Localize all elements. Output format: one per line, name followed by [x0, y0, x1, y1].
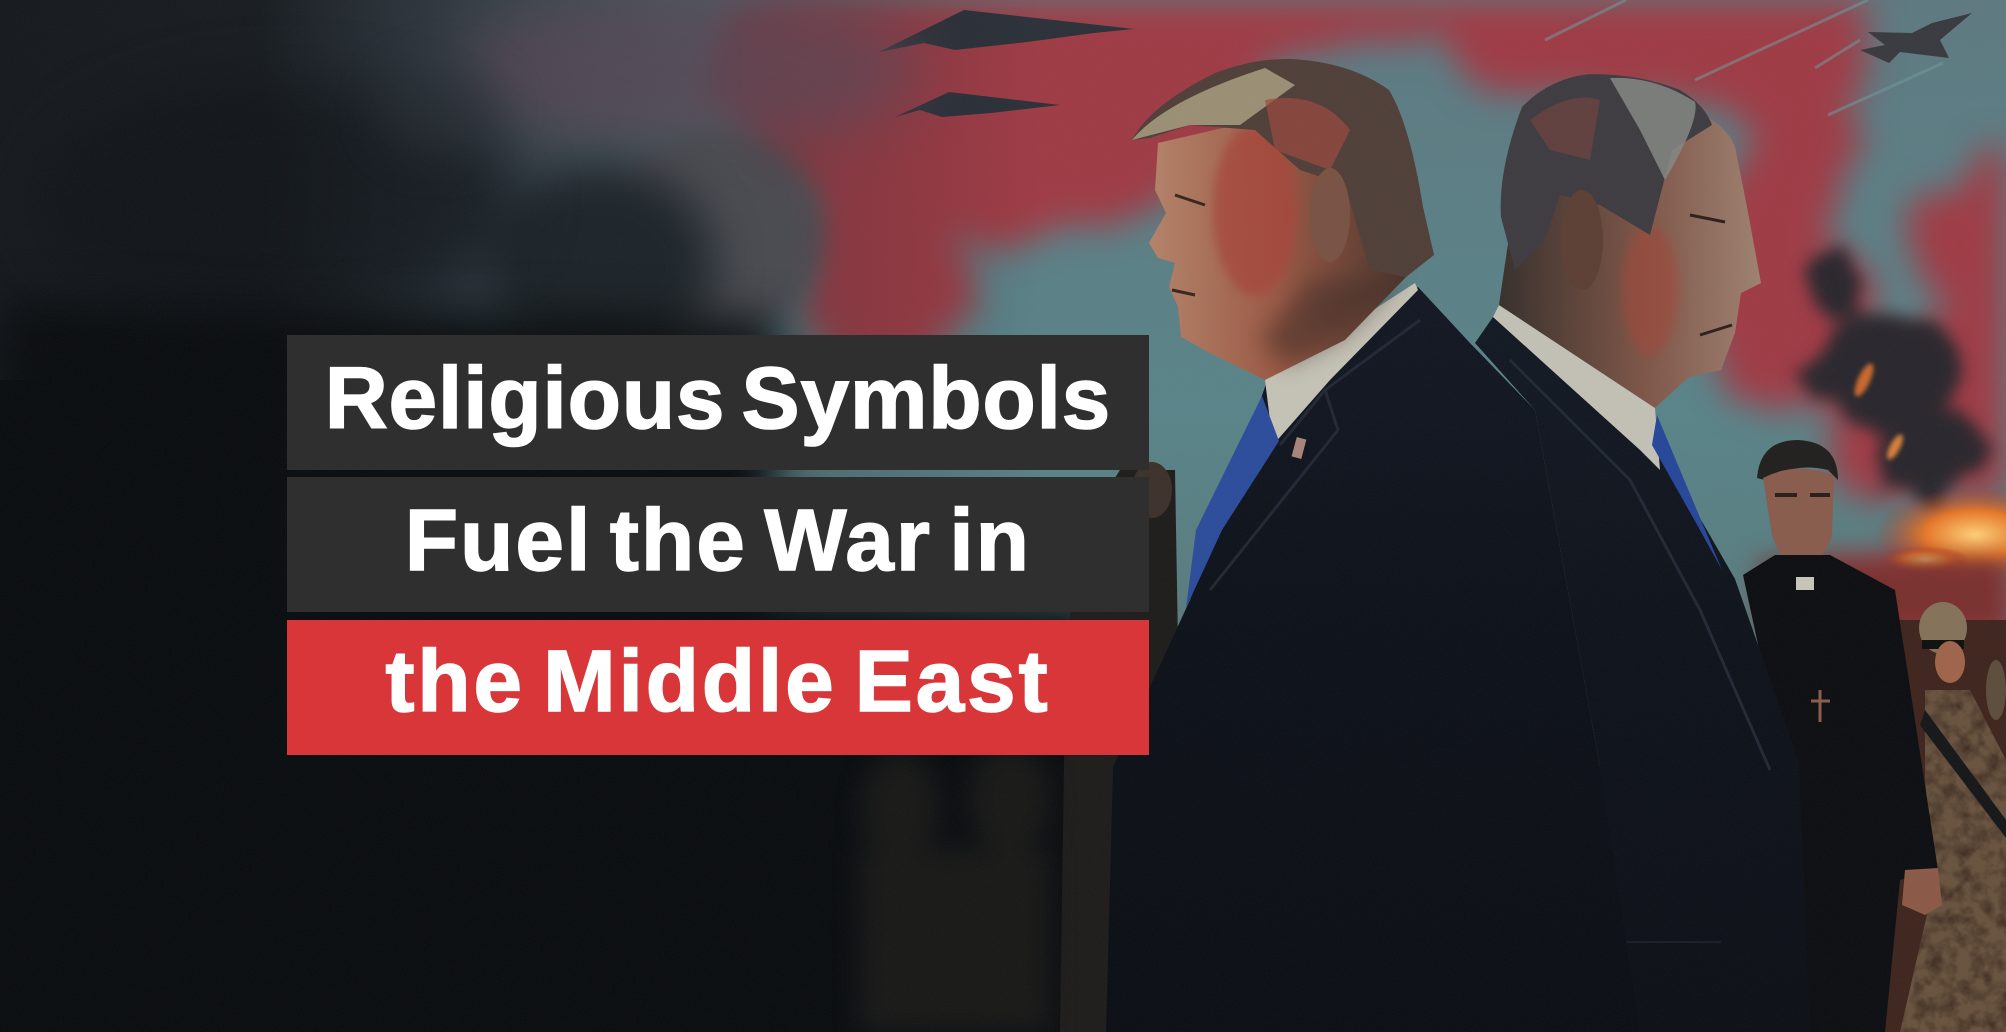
title line two [287, 477, 1149, 612]
collar [1265, 283, 1418, 445]
lower background with crowd of soldiers [860, 462, 1180, 1032]
soldier [1900, 602, 2006, 1032]
ear [1561, 190, 1603, 290]
icon: bomber one [879, 10, 1134, 52]
title line one [287, 335, 1149, 470]
flag pin [1292, 437, 1306, 459]
hair [1501, 74, 1712, 270]
title line one: Religious Symbols [325, 350, 1111, 447]
face [1149, 110, 1406, 380]
red clouds [715, 0, 2006, 650]
hair [1132, 59, 1434, 277]
contrails [1545, 0, 1943, 115]
tie [1652, 415, 1722, 570]
dark smoke clouds right [1810, 250, 1990, 500]
suit [1106, 287, 1640, 1032]
title line two: Fuel the War in [405, 492, 1031, 589]
suit [1475, 317, 1810, 1032]
pectoral cross [1811, 690, 1830, 722]
title line three: the Middle East [385, 633, 1051, 730]
left smoke mass [0, 0, 1105, 1032]
title line three [287, 620, 1149, 755]
explosions and fire [1851, 361, 2006, 583]
red skin tones [1622, 225, 1678, 355]
icon: fighter jet [1860, 13, 1972, 63]
lapel [1210, 320, 1420, 590]
aircraft and contrails [879, 0, 1972, 117]
eye and mouth shadow [1172, 195, 1205, 295]
red skin tones [1213, 125, 1297, 295]
neck shadow [1260, 278, 1400, 365]
red ground [1760, 560, 2006, 630]
hand [1902, 868, 1942, 915]
Trump figure [1106, 59, 1640, 1032]
priest [1743, 440, 1942, 1032]
clerical collar [1796, 577, 1814, 590]
collar [1493, 305, 1660, 470]
Netanyahu figure [1475, 74, 1810, 1032]
pocket flap [1623, 941, 1721, 943]
eye and mouth shadow [1690, 215, 1732, 335]
face [1499, 108, 1761, 408]
icon: bomber two [895, 92, 1060, 117]
lapel line [1510, 360, 1770, 770]
ear [1310, 168, 1350, 262]
tie [1186, 396, 1279, 608]
right background figures [1743, 440, 2006, 1032]
